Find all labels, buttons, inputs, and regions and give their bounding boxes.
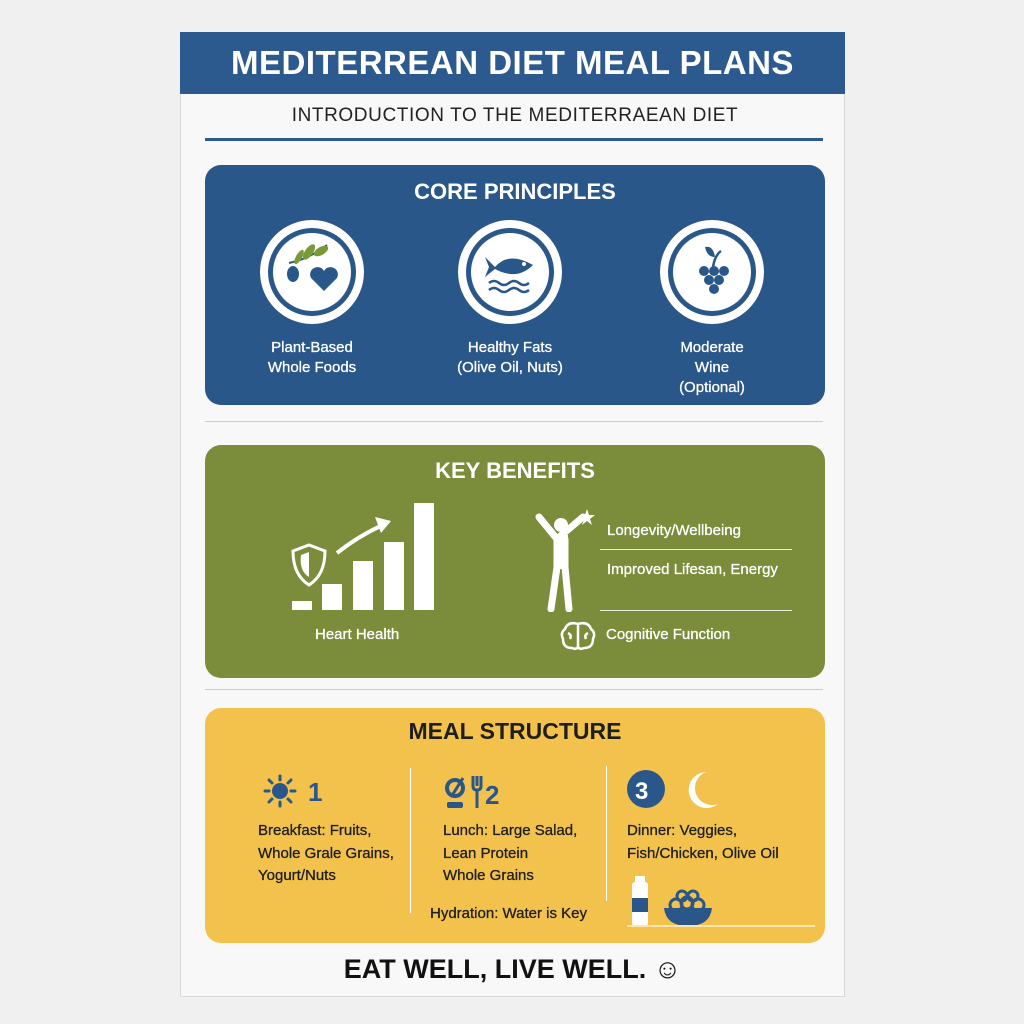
panel: key benefits — [205, 445, 825, 678]
chart: heart health bar chart — [292, 503, 434, 610]
label: wine: (Optional) — [679, 379, 745, 396]
icon: salad fork 2 — [445, 776, 499, 810]
icon: olive and heart — [260, 220, 364, 324]
label: healthy fats — [457, 339, 563, 376]
text: breakfast: Whole Grale Grains, — [258, 844, 394, 862]
heading: key benefits: KEY BENEFITS — [435, 458, 595, 483]
icon: person with star — [536, 509, 595, 612]
subtitle: INTRODUCTION TO THE MEDITERRAEAN DIET — [292, 105, 738, 126]
icon: 3 and moon — [627, 770, 718, 808]
icon: fish — [458, 220, 562, 324]
text: longevity: Longevity/Wellbeing — [607, 522, 741, 539]
text: breakfast: Breakfast: Fruits, — [258, 822, 371, 839]
label: healthy fats: (Olive Oil, Nuts) — [457, 359, 563, 376]
heading: core principles: CORE PRINCIPLES — [414, 179, 616, 204]
text: lunch — [442, 822, 577, 884]
text: dinner: Dinner: Veggies, — [627, 822, 737, 839]
text: lunch: Whole Grains — [443, 867, 534, 884]
text: breakfast — [258, 822, 394, 884]
text: lunch: Lunch: Large Salad, — [443, 822, 577, 839]
panel: core principles — [205, 165, 825, 405]
text: dinner — [627, 822, 779, 862]
icon: grapes — [660, 220, 764, 324]
label: wine: Moderate — [680, 339, 744, 356]
icon: sun 1 — [264, 774, 322, 808]
text: lunch: Lean Protein — [443, 844, 528, 862]
label: wine — [679, 339, 745, 396]
text: lifespan: Improved Lifesan, Energy — [607, 561, 778, 578]
text: cognitive: Cognitive Function — [606, 626, 730, 643]
heading: meal structure: MEAL STRUCTURE — [409, 718, 621, 744]
label: wine: Wine — [695, 359, 729, 376]
title: MEDITERREAN DIET MEAL PLANS — [231, 44, 794, 81]
label: healthy fats: Healthy Fats — [468, 339, 552, 356]
text: dinner: Fish/Chicken, Olive Oil — [627, 844, 779, 862]
label: heart health: Heart Health — [315, 626, 399, 643]
panel: meal structure — [205, 708, 825, 943]
icon: 3 and moon: 3 — [635, 778, 648, 805]
icon: salad fork 2: 2 — [485, 780, 499, 810]
text: breakfast: Yogurt/Nuts — [258, 867, 336, 884]
icon: brain — [560, 622, 596, 650]
label: plant-based: Plant-Based — [271, 339, 353, 356]
title — [180, 32, 845, 94]
page card — [180, 32, 845, 997]
icon: bottle and bowl — [632, 876, 712, 925]
text: hydration: Hydration: Water is Key — [430, 905, 587, 922]
icon: sun 1: 1 — [308, 777, 322, 807]
label: plant-based: Whole Foods — [268, 359, 356, 376]
footer tagline: EAT WELL, LIVE WELL. ☺ — [344, 954, 681, 984]
label: plant-based — [268, 339, 356, 376]
